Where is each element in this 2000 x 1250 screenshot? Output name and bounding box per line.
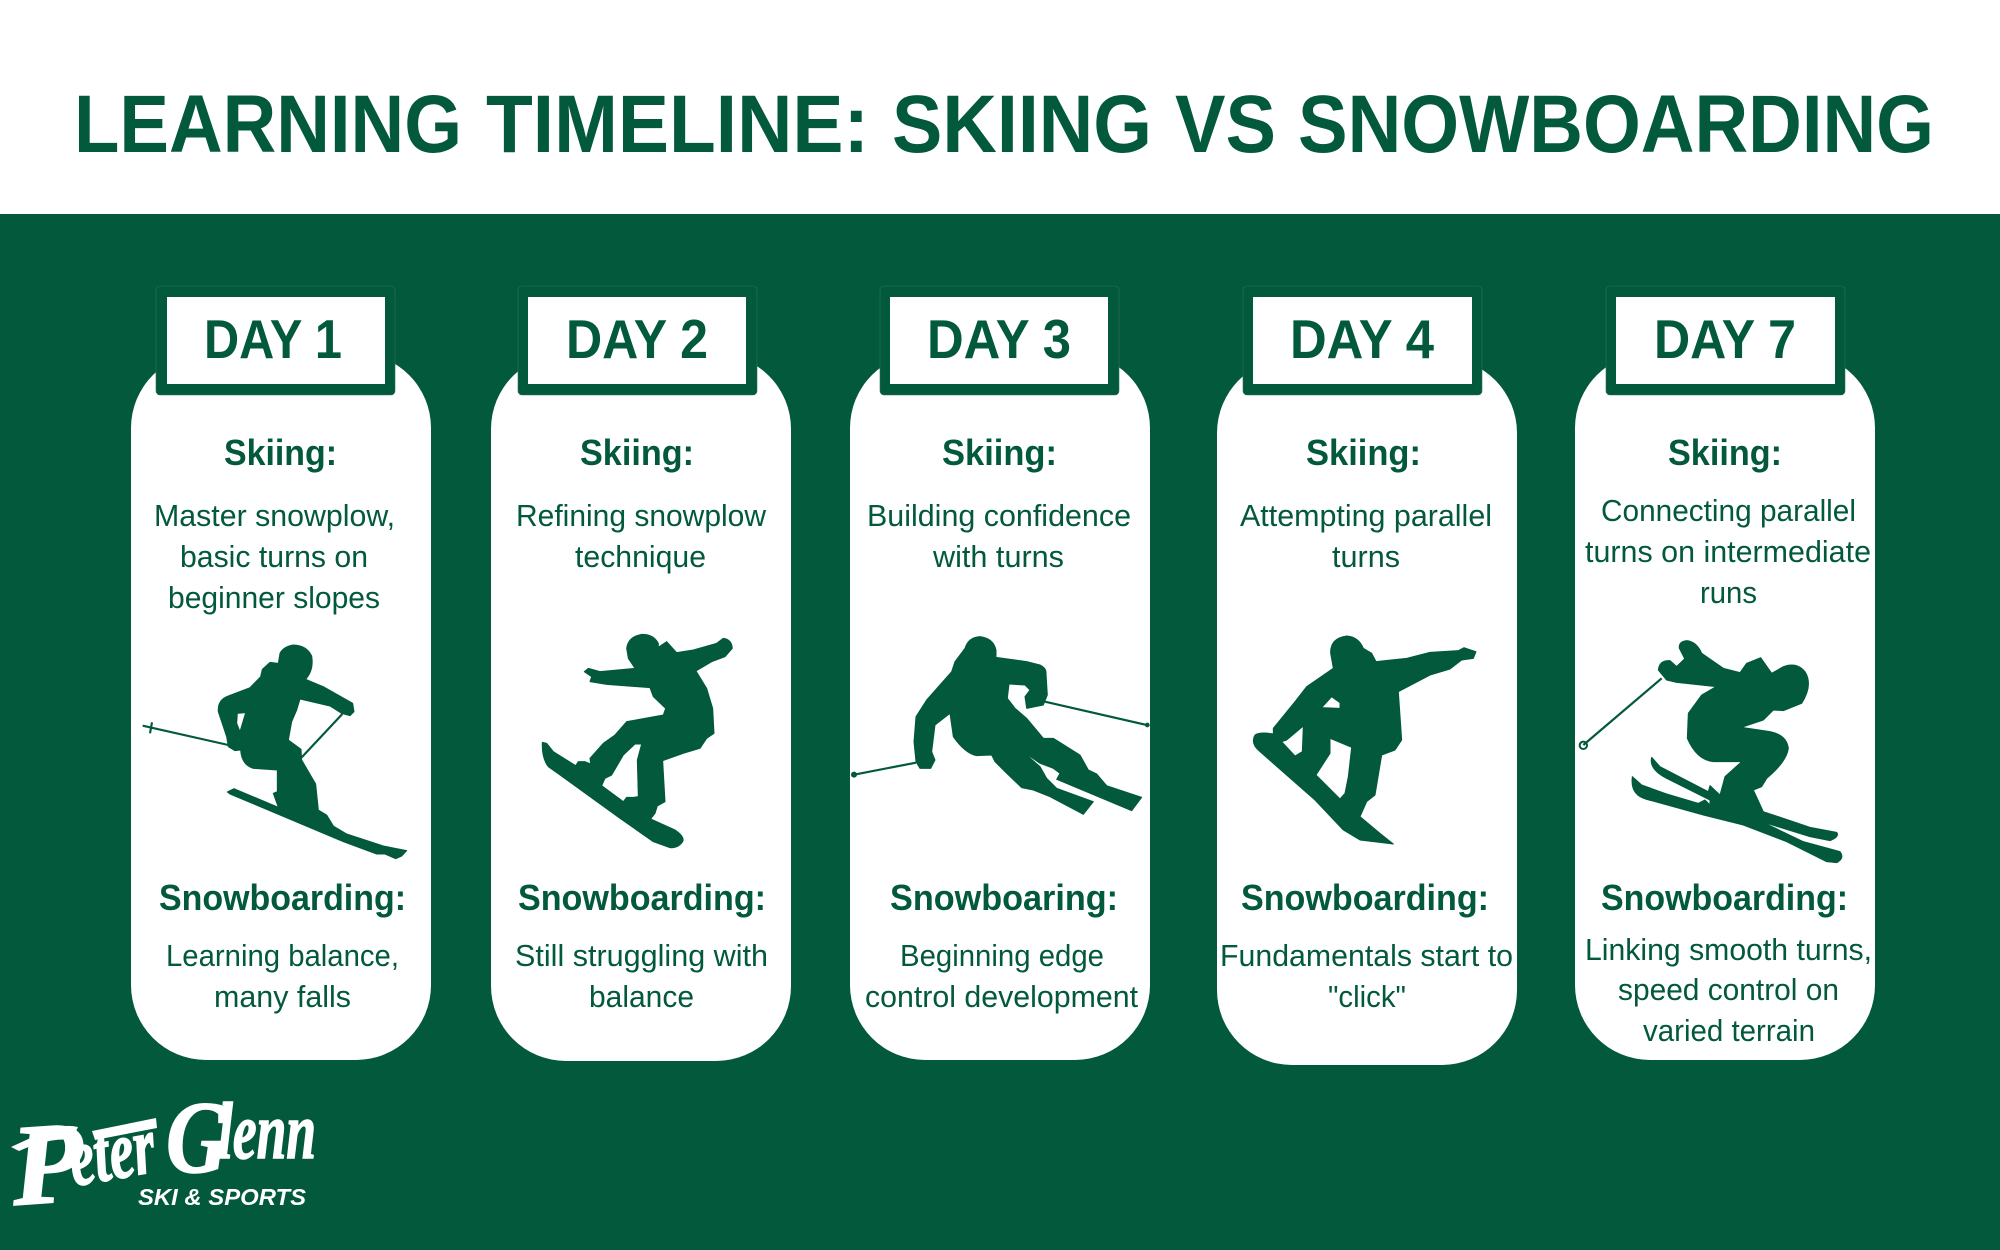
title: LEARNING xyxy=(74,79,462,170)
skiing description: with turns xyxy=(932,539,1064,574)
skiing description xyxy=(867,498,1131,574)
day label: DAY 1 xyxy=(204,308,342,370)
title: TIMELINE: xyxy=(486,79,869,170)
snowboarding description: Linking smooth turns, xyxy=(1585,932,1872,967)
day label xyxy=(518,286,757,395)
panel: day 7 xyxy=(1575,286,1875,1060)
snowboarding description xyxy=(166,938,399,1014)
skiing description: Attempting parallel xyxy=(1240,498,1492,533)
skiing description: Building confidence xyxy=(867,498,1131,533)
day label: DAY 7 xyxy=(1654,308,1796,370)
icon: skier silhouette xyxy=(1580,641,1842,863)
skiing description: Refining snowplow xyxy=(516,498,767,533)
snowboarding description: "click" xyxy=(1328,979,1406,1014)
skiing description: turns on intermediate xyxy=(1585,534,1871,569)
logo: Peter Glenn Ski & Sports: eter xyxy=(61,1099,163,1204)
skiing description: runs xyxy=(1700,575,1757,610)
skiing description xyxy=(154,498,395,615)
panel: day 3 xyxy=(850,286,1150,1060)
card background xyxy=(131,353,431,1060)
day label: DAY 2 xyxy=(566,308,708,370)
snowboarding heading: Snowboarding: xyxy=(159,877,406,918)
skiing heading: Skiing: xyxy=(1668,432,1782,473)
card background xyxy=(1575,353,1875,1060)
snowboarding description: Fundamentals start to xyxy=(1220,938,1513,973)
snowboarding description xyxy=(1585,932,1872,1048)
snowboarding description: balance xyxy=(589,979,694,1014)
snowboarding heading: Snowboarding: xyxy=(1241,877,1489,918)
skiing description xyxy=(1240,498,1492,574)
day label xyxy=(1606,286,1845,395)
logo: Peter Glenn Ski & Sports: G xyxy=(166,1081,228,1195)
snowboarding heading: Snowboarding: xyxy=(1601,877,1848,918)
skiing heading: Skiing: xyxy=(1306,432,1421,473)
snowboarding description: control development xyxy=(865,979,1138,1014)
skiing heading: Skiing: xyxy=(580,432,694,473)
skiing description xyxy=(1585,493,1871,610)
panel: day 1 xyxy=(131,286,431,1060)
snowboarding description: Beginning edge xyxy=(900,938,1104,973)
snowboarding description xyxy=(865,938,1138,1014)
snowboarding heading: Snowboaring: xyxy=(890,877,1118,918)
snowboarding description: Still struggling with xyxy=(515,938,768,973)
icon: snowboarder silhouette xyxy=(542,634,732,848)
snowboarding description xyxy=(1220,938,1513,1014)
icon: snowboarder silhouette xyxy=(1253,636,1476,844)
snowboarding description: varied terrain xyxy=(1643,1013,1815,1048)
day label xyxy=(880,286,1119,395)
day label: DAY 4 xyxy=(1290,308,1434,370)
skiing heading: Skiing: xyxy=(224,432,337,473)
skiing description: basic turns on xyxy=(180,539,368,574)
title: SKIING xyxy=(892,79,1152,170)
snowboarding heading: Snowboarding: xyxy=(518,877,766,918)
day label xyxy=(1243,286,1482,395)
logo: Peter Glenn Ski & Sports xyxy=(6,1081,316,1231)
day label: DAY 3 xyxy=(927,308,1071,370)
skiing description: Connecting parallel xyxy=(1601,493,1856,528)
snowboarding description: speed control on xyxy=(1618,972,1839,1007)
skiing description: technique xyxy=(575,539,706,574)
logo: Peter Glenn Ski & Sports: P xyxy=(6,1098,89,1231)
icon: skier silhouette xyxy=(851,637,1150,814)
skiing heading: Skiing: xyxy=(942,432,1057,473)
skiing description: Master snowplow, xyxy=(154,498,395,533)
title xyxy=(74,79,1934,170)
panel: day 2 xyxy=(491,286,791,1061)
card background xyxy=(1217,358,1517,1065)
logo: Peter Glenn Ski & Sports: SKI & SPORTS xyxy=(138,1184,307,1210)
panel: day 4 xyxy=(1217,286,1517,1065)
skiing description: beginner slopes xyxy=(168,580,380,615)
card background xyxy=(850,353,1150,1060)
icon: skier silhouette xyxy=(143,645,407,859)
title: VS xyxy=(1175,79,1276,170)
card background xyxy=(491,354,791,1061)
logo: Peter Glenn Ski & Sports: lenn xyxy=(218,1088,316,1176)
title: SNOWBOARDING xyxy=(1298,79,1934,170)
snowboarding description: many falls xyxy=(214,979,351,1014)
day label xyxy=(156,286,395,395)
skiing description xyxy=(516,498,767,574)
snowboarding description: Learning balance, xyxy=(166,938,399,973)
skiing description: turns xyxy=(1332,539,1400,574)
snowboarding description xyxy=(515,938,768,1014)
